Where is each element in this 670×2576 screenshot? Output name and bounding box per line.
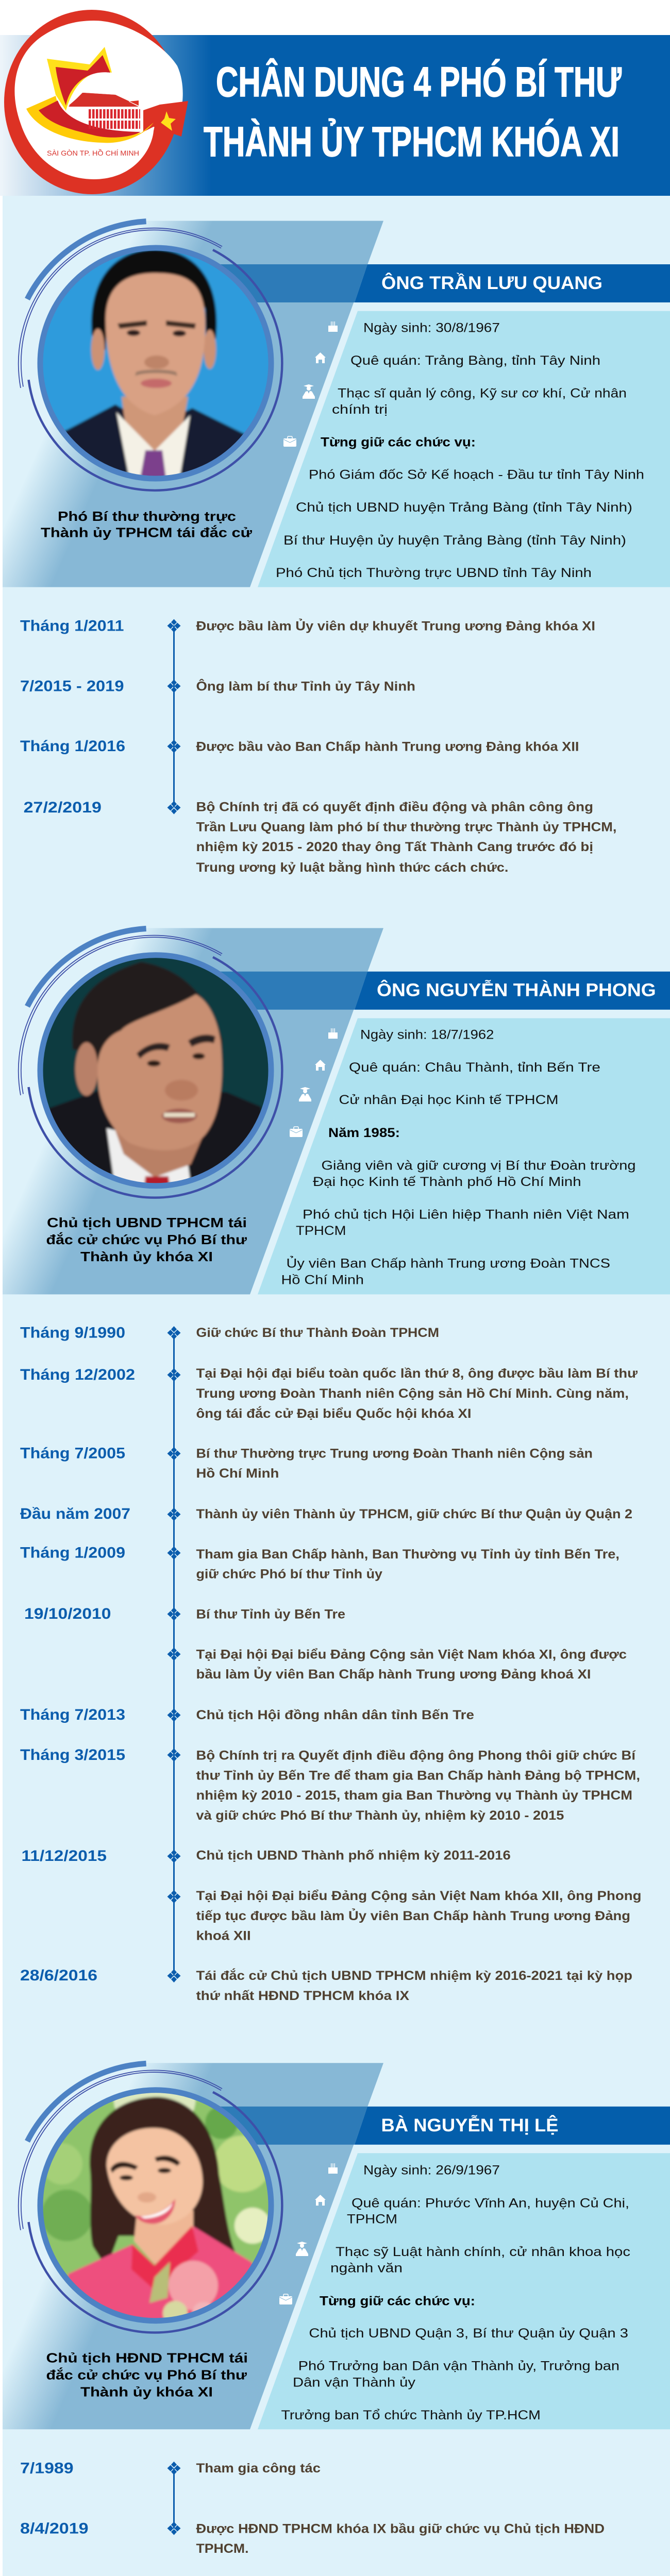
positions list: Bí thư Huyện ủy huyện Trảng Bàng (tỉnh Tây Ninh)	[283, 533, 626, 548]
icon: briefcase	[279, 2294, 292, 2304]
event	[20, 1505, 632, 1522]
event: TPHCM.	[196, 2541, 248, 2556]
caption: Chủ tịch UBND TPHCM tái	[47, 1215, 247, 1230]
event	[20, 1706, 474, 1723]
panel: profile Trần Lưu Quang	[3, 221, 670, 587]
positions list: Ủy viên Ban Chấp hành Trung ương Đoàn TNCS	[287, 1256, 610, 1271]
caption	[46, 1215, 247, 1264]
event: Thành ủy viên Thành ủy TPHCM, giữ chức Bí thư Quận ủy Quận 2	[196, 1507, 632, 1521]
event: Chủ tịch UBND Thành phố nhiệm kỳ 2011-2016	[196, 1848, 511, 1862]
event	[20, 1747, 640, 1823]
event: Bí thư Thường trực Trung ương Đoàn Thanh niên Cộng sản	[196, 1447, 593, 1461]
icon: graduate	[299, 1087, 311, 1101]
event	[24, 799, 617, 875]
event: Tháng 7/2005	[20, 1445, 125, 1462]
icon: home	[315, 1060, 326, 1071]
hometown	[347, 2196, 629, 2226]
positions list: Chủ tịch UBND huyện Trảng Bàng (tỉnh Tây Ninh)	[296, 500, 632, 515]
positions list	[276, 435, 644, 580]
event: bầu làm Ủy viên Ban Chấp hành Trung ương Đảng khoá XI	[196, 1666, 591, 1682]
positions list	[281, 1126, 636, 1287]
event	[20, 1545, 619, 1582]
positions list: Từng giữ các chức vụ:	[321, 435, 476, 449]
event: nhiệm kỳ 2010 - 2015, tham gia Ban Thường vụ Thành ủy TPHCM	[196, 1788, 632, 1803]
event	[20, 1445, 593, 1481]
positions list: Phó chủ tịch Hội Liên hiệp Thanh niên Việt Nam	[303, 1208, 629, 1222]
hometown: Quê quán: Trảng Bàng, tỉnh Tây Ninh	[350, 353, 600, 368]
photo: Nguyễn Thành Phong	[43, 958, 268, 1183]
birth date: Ngày sinh: 30/8/1967	[363, 321, 500, 335]
event: 28/6/2016	[20, 1967, 97, 1984]
education: Thạc sỹ Luật hành chính, cử nhân khoa học	[336, 2245, 630, 2259]
event: 19/10/2010	[24, 1605, 111, 1622]
icon: graduate	[303, 384, 315, 399]
event: nhiệm kỳ 2015 - 2020 thay ông Tất Thành Cang trước đó bị	[196, 840, 593, 854]
event: Giữ chức Bí thư Thành Đoàn TPHCM	[196, 1326, 439, 1340]
event	[20, 617, 595, 634]
logo caption: SÀI GÒN TP. HỒ CHÍ MINH	[47, 148, 139, 157]
icon: birthday candle	[328, 321, 338, 332]
event	[20, 1366, 638, 1421]
name: Bà Nguyễn Thị Lệ: BÀ NGUYỄN THỊ LỆ	[381, 2115, 559, 2136]
positions list: Đại học Kinh tế Thành phố Hồ Chí Minh	[313, 1175, 581, 1189]
hometown: Quê quán: Phước Vĩnh An, huyện Củ Chi,	[351, 2196, 629, 2210]
name: Ông Trần Lưu Quang: ÔNG TRẦN LƯU QUANG	[381, 273, 602, 293]
event: Tham gia công tác	[196, 2461, 321, 2476]
event: 27/2/2019	[24, 799, 102, 816]
icon: home	[315, 352, 326, 363]
event: 7/2015 - 2019	[20, 677, 124, 694]
event	[20, 677, 415, 694]
event: Tái đắc cử Chủ tịch UBND TPHCM nhiệm kỳ 2016-2021 tại kỳ họp	[196, 1968, 632, 1983]
event: Tháng 7/2013	[20, 1706, 125, 1723]
timeline: Nguyễn Thị Lệ	[20, 2460, 605, 2556]
timeline: Nguyễn Thành Phong	[20, 1324, 641, 2003]
icon: birthday candle	[328, 1028, 338, 1039]
icon: birthday candle	[328, 2163, 338, 2174]
positions list: Giảng viên và giữ cương vị Bí thư Đoàn trường	[322, 1158, 636, 1173]
event: Tháng 1/2009	[20, 1545, 125, 1562]
title	[204, 59, 622, 165]
icon: briefcase	[283, 436, 296, 447]
event: Được bầu vào Ban Chấp hành Trung ương Đảng khóa XII	[196, 740, 579, 754]
header banner	[0, 10, 670, 196]
caption: Thành ủy khóa XI	[80, 2384, 213, 2399]
positions list: Chủ tịch UBND Quận 3, Bí thư Quận ủy Quận 3	[309, 2326, 628, 2341]
positions list: Hồ Chí Minh	[281, 1273, 364, 1287]
hometown: Quê quán: Châu Thành, tỉnh Bến Tre	[349, 1060, 600, 1075]
caption: Phó Bí thư thường trực	[58, 509, 236, 524]
event: giữ chức Phó bí thư Tỉnh ủy	[196, 1567, 382, 1582]
event: 11/12/2015	[22, 1848, 107, 1865]
event: ông tái đắc cử Đại biểu Quốc hội khóa XI	[196, 1405, 471, 1421]
event	[20, 738, 579, 755]
education	[330, 2245, 630, 2275]
positions list: Phó Giám đốc Sở Kế hoạch - Đầu tư tỉnh Tây Ninh	[309, 468, 644, 482]
event	[20, 2520, 605, 2556]
photo: Trần Lưu Quang	[43, 250, 268, 476]
event	[20, 2460, 321, 2477]
caption	[46, 2350, 248, 2399]
event: Trung ương kỷ luật bằng hình thức cách chức.	[196, 859, 508, 875]
event: Bộ Chính trị ra Quyết định điều động ông Phong thôi giữ chức Bí	[196, 1748, 636, 1762]
caption: đắc cử chức vụ Phó Bí thư	[46, 2367, 247, 2383]
event: và giữ chức Phó Bí thư Thành ủy, nhiệm kỳ 2010 - 2015	[196, 1808, 564, 1823]
event: Tháng 9/1990	[20, 1324, 125, 1341]
event: khoá XII	[196, 1929, 251, 1943]
event: Đầu năm 2007	[20, 1505, 130, 1522]
logo: Sài Gòn TP. Hồ Chí Minh	[4, 10, 188, 194]
event: Chủ tịch Hội đồng nhân dân tỉnh Bến Tre	[196, 1708, 474, 1722]
caption: Thành ủy khóa XI	[80, 1249, 213, 1264]
event: tiếp tục được bầu làm Ủy viên Ban Chấp hành Trung ương Đảng	[196, 1908, 630, 1923]
event: Tháng 1/2016	[20, 738, 125, 755]
event: thư Tỉnh ủy Bến Tre để tham gia Ban Chấp hành Đảng bộ TPHCM,	[196, 1768, 640, 1783]
education: ngành văn	[330, 2261, 403, 2275]
event: Bộ Chính trị đã có quyết định điều động và phân công ông	[196, 800, 593, 814]
event: Tại Đại hội đại biểu toàn quốc lần thứ 8, ông được bầu làm Bí thư	[196, 1366, 638, 1381]
event: Được bầu làm Ủy viên dự khuyết Trung ương Đảng khóa XI	[196, 618, 595, 634]
event: Bí thư Tỉnh ủy Bến Tre	[196, 1607, 345, 1621]
positions list: Trưởng ban Tổ chức Thành ủy TP.HCM	[281, 2408, 541, 2422]
event: Tháng 3/2015	[20, 1747, 125, 1764]
education: chính trị	[332, 402, 388, 417]
event: Tham gia Ban Chấp hành, Ban Thường vụ Tỉnh ủy tỉnh Bến Tre,	[196, 1547, 619, 1562]
birth date: Ngày sinh: 26/9/1967	[363, 2163, 500, 2178]
event	[20, 1324, 439, 1341]
positions list: Năm 1985:	[328, 1126, 400, 1140]
panel: profile Nguyễn Thành Phong	[3, 928, 670, 1294]
birth date: Ngày sinh: 18/7/1962	[360, 1027, 494, 1042]
event	[22, 1848, 511, 1865]
caption: Chủ tịch HĐND TPHCM tái	[46, 2350, 248, 2366]
caption: đắc cử chức vụ Phó Bí thư	[46, 1232, 247, 1247]
name: Ông Nguyễn Thành Phong: ÔNG NGUYỄN THÀNH PHONG	[377, 980, 656, 1001]
icon: home	[315, 2195, 326, 2206]
caption: Thành ủy TPHCM tái đắc cử	[41, 524, 252, 540]
education: Thạc sĩ quản lý công, Kỹ sư cơ khí, Cử nhân	[338, 386, 627, 400]
event: Hồ Chí Minh	[196, 1466, 279, 1481]
photo: Nguyễn Thị Lệ	[43, 2093, 268, 2318]
panel: profile Nguyễn Thị Lệ	[3, 2056, 670, 2429]
icon: graduate	[296, 2242, 308, 2256]
event: Ông làm bí thư Tỉnh ủy Tây Ninh	[196, 678, 415, 693]
education	[332, 386, 627, 417]
event: thứ nhất HĐND TPHCM khóa IX	[196, 1989, 409, 2003]
education: Cử nhân Đại học Kinh tế TPHCM	[339, 1093, 559, 1107]
positions list: Phó Trưởng ban Dân vận Thành ủy, Trưởng ban	[298, 2359, 619, 2374]
event: Tại Đại hội Đại biểu Đảng Cộng sản Việt Nam khóa XI, ông được	[196, 1648, 627, 1662]
event	[167, 1648, 627, 1682]
event	[24, 1605, 345, 1622]
timeline: Trần Lưu Quang	[20, 617, 616, 875]
positions list: TPHCM	[296, 1224, 346, 1238]
event: Tại Đại hội Đại biểu Đảng Cộng sản Việt Nam khóa XII, ông Phong	[196, 1889, 641, 1903]
event: Tháng 12/2002	[20, 1366, 135, 1383]
positions list: Từng giữ các chức vụ:	[320, 2294, 475, 2308]
positions list: Phó Chủ tịch Thường trực UBND tỉnh Tây Ninh	[276, 566, 592, 580]
hometown: TPHCM	[347, 2212, 397, 2226]
event: Tháng 1/2011	[20, 617, 124, 634]
event: Trung ương Đoàn Thanh niên Cộng sản Hồ Chí Minh. Cùng năm,	[196, 1386, 629, 1401]
event: Được HĐND TPHCM khóa IX bầu giữ chức vụ Chủ tịch HĐND	[196, 2521, 605, 2536]
event: 7/1989	[20, 2460, 74, 2477]
caption	[41, 509, 252, 540]
event	[167, 1889, 641, 1943]
event: 8/4/2019	[20, 2520, 89, 2537]
positions list	[281, 2294, 628, 2422]
event	[20, 1967, 632, 2003]
icon: briefcase	[290, 1127, 303, 1137]
positions list: Dân vận Thành ủy	[293, 2375, 416, 2389]
event: Trần Lưu Quang làm phó bí thư thường trực Thành ủy TPHCM,	[196, 820, 616, 835]
